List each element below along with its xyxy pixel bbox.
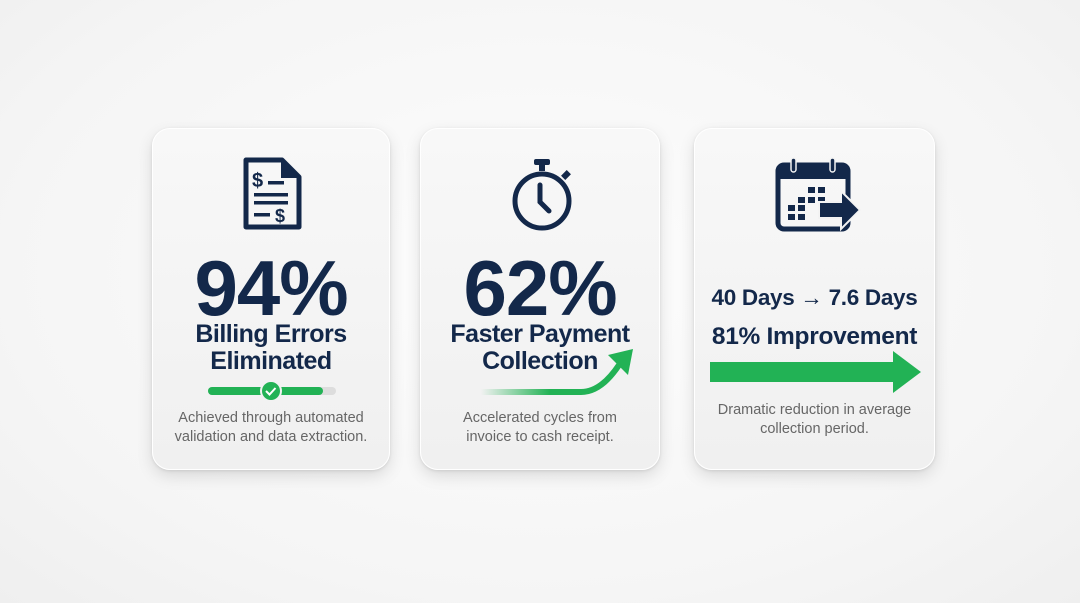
description: Dramatic reduction in average (718, 402, 911, 418)
description: validation and data extraction. (175, 429, 367, 445)
description: collection period. (760, 421, 869, 437)
stat: 62%: 62% (463, 244, 617, 332)
heading: Eliminated (210, 347, 332, 375)
description: Accelerated cycles from (463, 410, 617, 426)
icon: invoice document: $ (252, 170, 263, 192)
icon: invoice document (244, 158, 302, 230)
heading: Faster Payment (450, 320, 630, 348)
description: invoice to cash receipt. (466, 429, 614, 445)
heading: Billing Errors (195, 320, 347, 348)
description (463, 410, 617, 445)
heading (195, 320, 347, 375)
progress bar with check (208, 382, 336, 400)
icon: rising green arrow (484, 349, 633, 395)
description (174, 410, 367, 445)
icon: green arrow (710, 351, 921, 393)
panel: collection period (694, 128, 935, 470)
icon: invoice document: $ (275, 206, 285, 226)
panel: billing errors (152, 128, 390, 470)
icon: calendar with arrow (776, 158, 859, 232)
stat: 94%: 94% (194, 244, 348, 332)
heading: Collection (482, 347, 598, 375)
heading (450, 320, 630, 375)
panel: payment collection (420, 128, 660, 470)
stat: days reduction: 40 Days → 7.6 Days (712, 285, 918, 310)
heading: 81% improvement: 81% Improvement (712, 323, 917, 350)
icon: stopwatch (512, 159, 572, 230)
description: Achieved through automated (178, 410, 364, 426)
description (718, 402, 911, 437)
